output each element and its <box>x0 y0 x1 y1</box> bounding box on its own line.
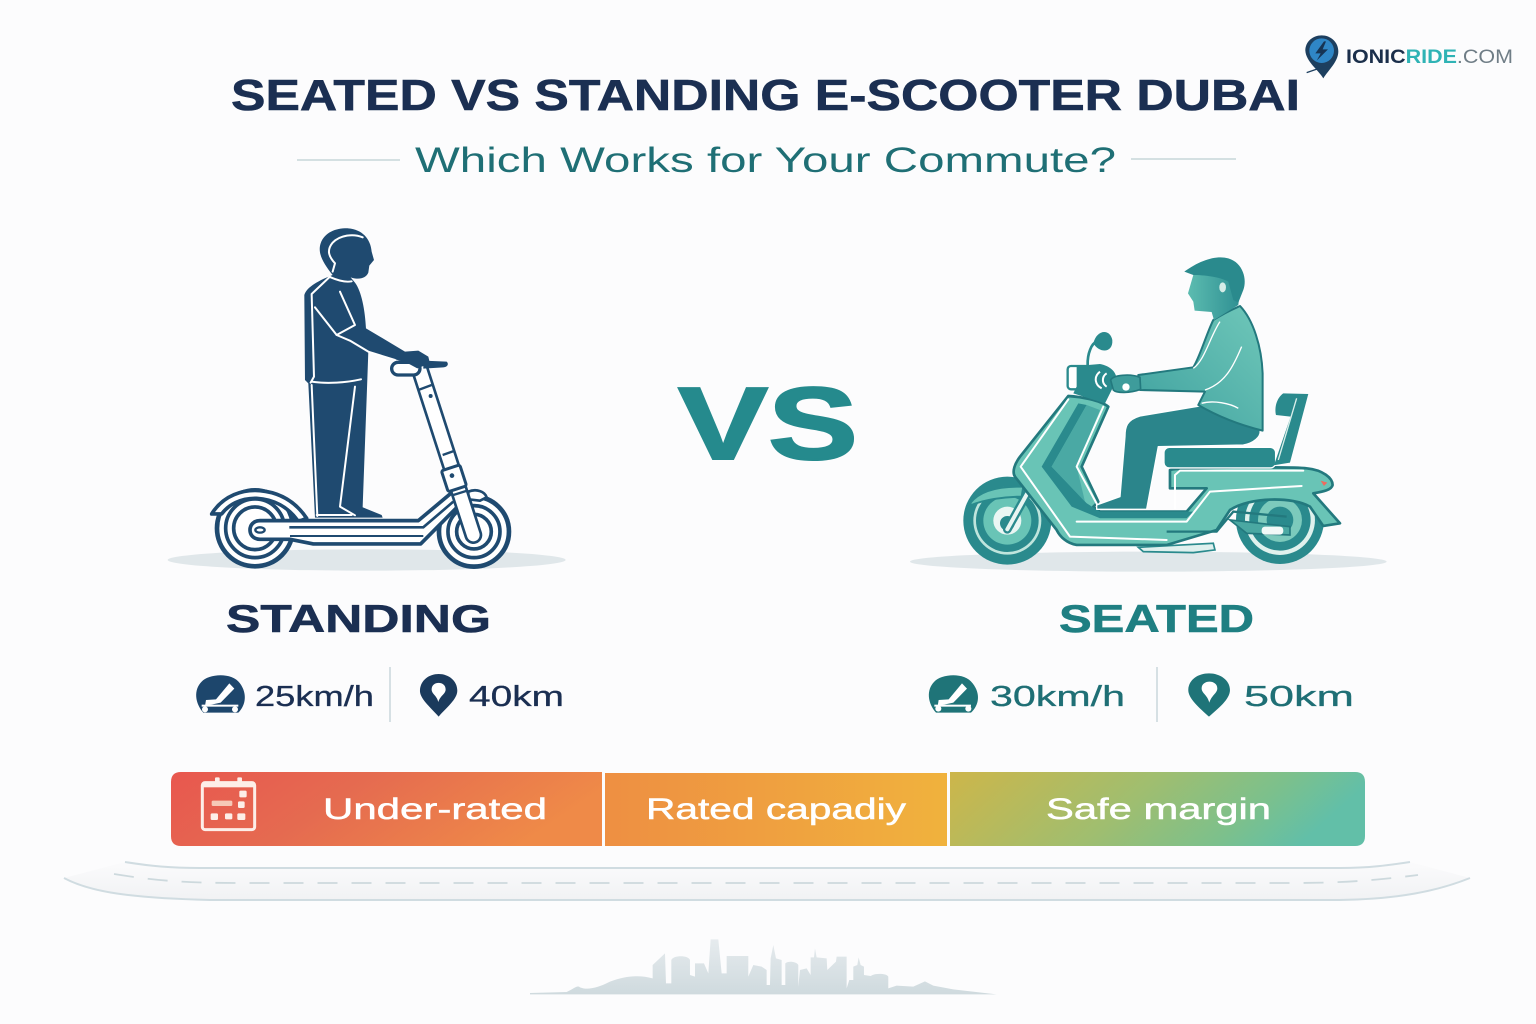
road <box>64 862 1470 900</box>
logo: IonicRide.com <box>1305 35 1513 78</box>
handlebar and mirror <box>1068 332 1117 403</box>
segment: safe margin <box>950 772 1365 846</box>
skyline of Dubai <box>530 939 997 994</box>
torso and arm <box>1138 306 1263 431</box>
handlebar <box>392 361 448 375</box>
speed value: 25km/h <box>255 681 374 713</box>
illustration: seated rider on moped <box>910 257 1387 572</box>
front wheel <box>439 497 509 567</box>
ground shadow <box>168 549 566 571</box>
backrest <box>1274 393 1308 465</box>
segment: under-rated <box>171 772 602 846</box>
front mudguard <box>970 487 1023 505</box>
icon: range pin <box>420 674 457 717</box>
deck <box>250 491 462 544</box>
icon: speedometer <box>196 675 245 713</box>
load rating bar <box>171 772 1365 846</box>
segment: rated capacity <box>605 773 947 846</box>
stem <box>418 370 473 535</box>
speed value: 30km/h <box>990 681 1125 713</box>
person silhouette <box>304 228 430 518</box>
heading: seated: SEATED <box>1059 598 1254 641</box>
front fork <box>1007 493 1027 529</box>
panel: standing label and specs <box>196 598 564 722</box>
ground shadow <box>910 552 1387 572</box>
icon: speedometer <box>929 675 978 713</box>
subtitle: Which Works for Your Commute? <box>415 141 1116 180</box>
scooter body <box>1014 396 1340 545</box>
seat <box>1164 447 1276 468</box>
range value: 40km <box>469 681 564 713</box>
tail light <box>1321 481 1327 486</box>
range value: 50km <box>1244 681 1354 713</box>
leg shield dark chevron <box>1042 403 1193 518</box>
head <box>1184 257 1245 320</box>
front fender <box>468 490 487 501</box>
legs <box>1097 406 1260 509</box>
VS label: VS <box>678 366 858 481</box>
title: SEATED VS STANDING E-SCOOTER DUBAI <box>231 71 1300 120</box>
front wheel <box>963 477 1051 565</box>
icon: calendar <box>202 777 255 830</box>
label: Under-rated <box>323 793 547 826</box>
rear fender <box>212 490 307 522</box>
swing arm <box>1230 520 1290 535</box>
panel: seated label and specs <box>929 598 1354 722</box>
label: Safe margin <box>1046 793 1271 826</box>
hand <box>1111 375 1141 392</box>
label: Rated capadiy <box>646 793 906 826</box>
heading: standing: STANDING <box>226 598 491 641</box>
rear wheel <box>217 490 293 566</box>
rear wheel <box>1236 476 1324 564</box>
illustration: standing rider on kick scooter <box>168 228 566 571</box>
footboard skid <box>1138 543 1215 553</box>
icon: logo pin with bolt <box>1305 35 1338 78</box>
logo wordmark: IONIC RIDE .COM <box>1346 47 1513 68</box>
icon: range pin <box>1188 673 1230 717</box>
